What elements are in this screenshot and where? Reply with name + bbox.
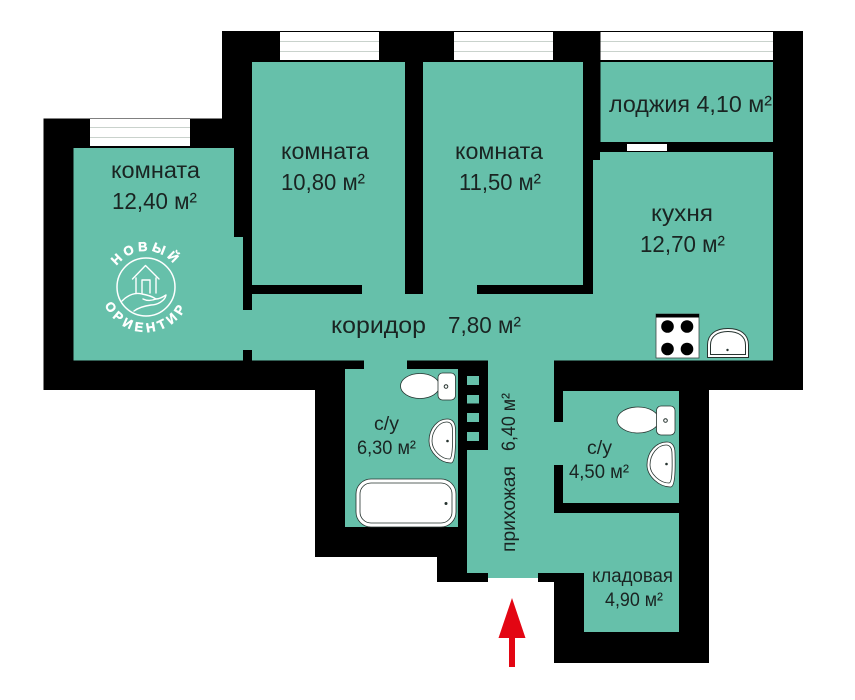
label: room 3	[455, 138, 544, 195]
label: kitchen	[640, 200, 725, 257]
window: room 2	[280, 32, 379, 60]
label: bathroom 2: 4,50 м²	[569, 462, 629, 483]
label: bathroom 1	[357, 414, 416, 459]
label: bathroom 1: с/у	[374, 414, 400, 435]
label: room 3: комната	[455, 138, 544, 164]
window: room 3	[454, 32, 553, 60]
label: room 2	[281, 138, 370, 195]
logo: Новый Ориентир	[106, 242, 183, 333]
icon: house in hand	[122, 266, 166, 311]
panel: storage room	[584, 572, 679, 632]
panel: bathroom 2	[563, 391, 679, 503]
panel: room 2	[252, 62, 405, 294]
wall vents	[467, 376, 479, 441]
window: kitchen to loggia	[627, 144, 667, 151]
label: bathroom 2	[569, 438, 629, 483]
label: hallway: прихожая	[499, 466, 520, 552]
icon: entrance arrow	[498, 598, 526, 667]
label: corridor	[331, 312, 521, 338]
label: corridor: 7,80 м²	[448, 312, 521, 338]
label: room 1: 12,40 м²	[112, 188, 197, 214]
label: storage room	[592, 566, 673, 611]
logo: Новый Ориентир: ОРИЕНТИР	[106, 302, 183, 333]
icon: toilet 1	[400, 373, 456, 400]
label: bathroom 2: с/у	[587, 438, 613, 459]
label: storage room: кладовая	[592, 566, 673, 587]
panel: kitchen	[593, 152, 773, 360]
panel: bathroom 1	[345, 359, 458, 527]
label: loggia: лоджия 4,10 м²	[609, 91, 772, 117]
label: kitchen: кухня	[651, 200, 713, 226]
logo: Новый Ориентир: НОВЫЙ	[110, 242, 180, 266]
label: room 2: 10,80 м²	[281, 169, 365, 195]
panel: loggia	[600, 62, 773, 142]
panel: hallway	[467, 359, 679, 578]
window: loggia	[600, 32, 773, 60]
label: hallway	[499, 393, 520, 552]
icon: washbasin 2	[647, 442, 675, 487]
panel: room 3	[423, 62, 583, 294]
icon: toilet 2	[617, 406, 675, 435]
label: hallway: 6,40 м²	[499, 393, 520, 451]
label: corridor: коридор	[331, 312, 426, 338]
label: room 1	[111, 157, 201, 214]
label: room 1: комната	[111, 157, 201, 183]
icon: kitchen sink	[708, 328, 748, 358]
icon: stove	[656, 314, 699, 358]
panel: room 1	[74, 148, 252, 360]
icon: washbasin 1	[429, 419, 456, 463]
panel: corridor	[252, 294, 594, 360]
label: bathroom 1: 6,30 м²	[357, 438, 416, 459]
label: storage room: 4,90 м²	[605, 590, 663, 611]
label: room 2: комната	[281, 138, 370, 164]
label: room 3: 11,50 м²	[459, 169, 541, 195]
label: kitchen: 12,70 м²	[640, 231, 725, 257]
window: room 1	[90, 119, 190, 146]
icon: bathtub	[356, 479, 456, 527]
